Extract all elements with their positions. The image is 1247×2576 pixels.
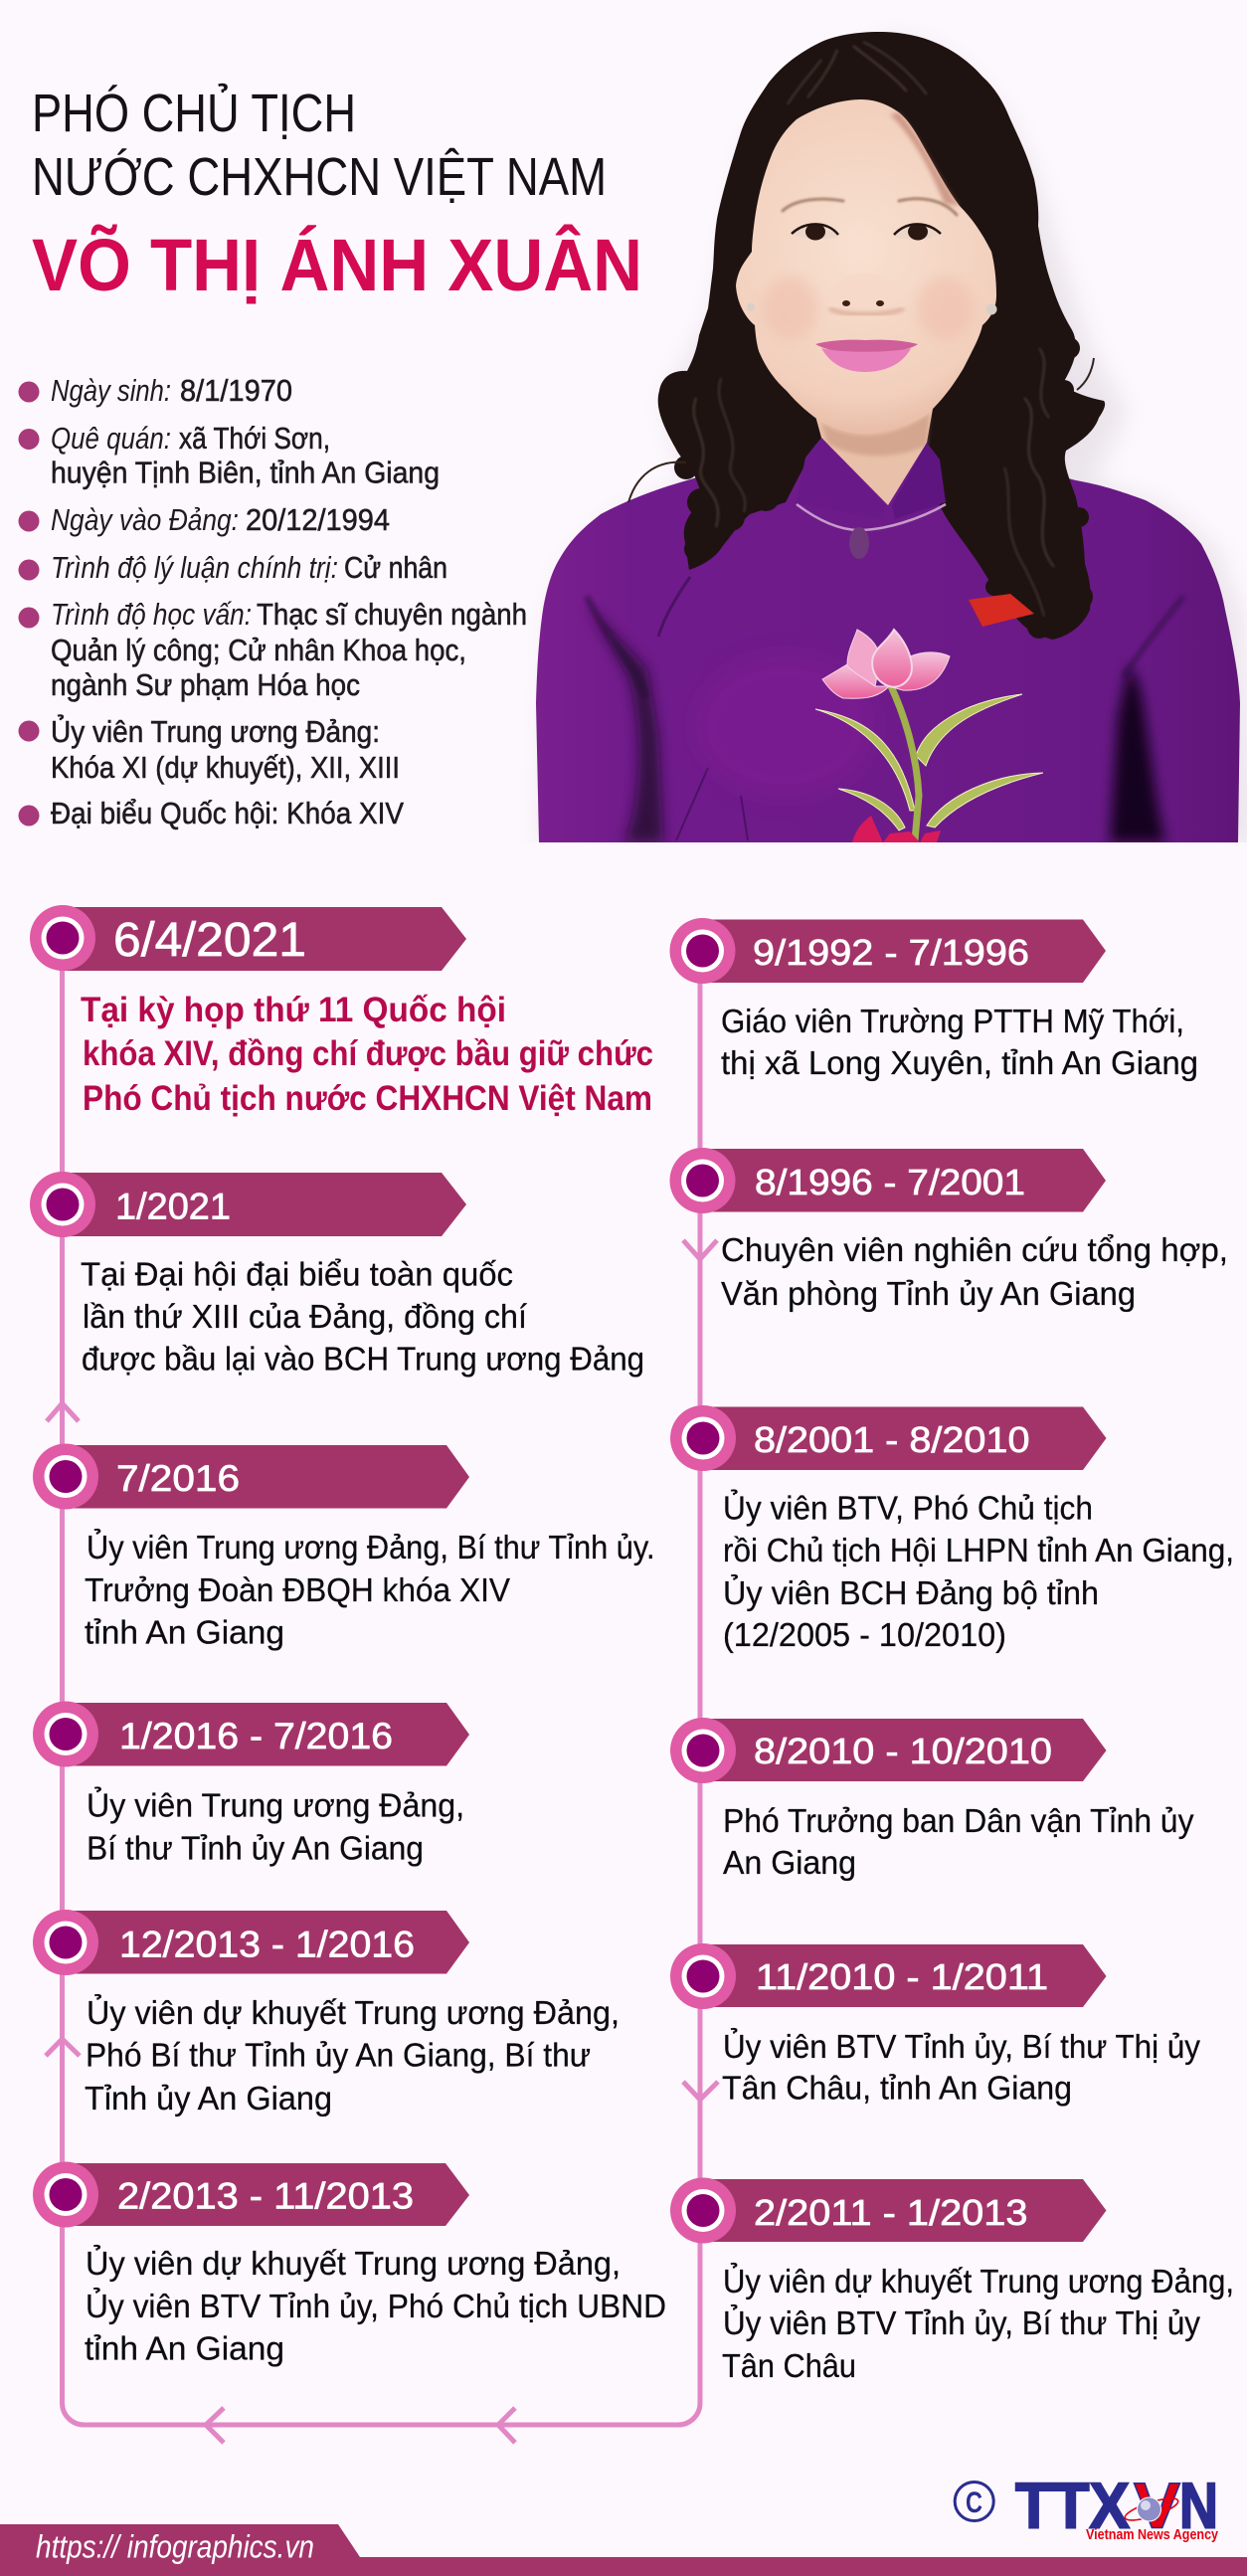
timeline entry: 11/2010 - 1/2011: Ủy viên BTV Tỉnh ủy, Bí thư Thị ủy (723, 2028, 1200, 2066)
stray hair wisps (628, 358, 1094, 502)
bullet: party admission date (18, 502, 390, 537)
timeline entry: 1/2016 - 7/2016: Bí thư Tỉnh ủy An Giang (87, 1830, 424, 1868)
timeline entry: 9/1992 - 7/1996: thị xã Long Xuyên, tỉnh An Giang (721, 1045, 1198, 1082)
timeline entry: 6/4/2021: Phó Chủ tịch nước CHXHCN Việt Nam (83, 1079, 652, 1118)
timeline entry: 8/1996 - 7/2001: Văn phòng Tỉnh ủy An Giang (721, 1276, 1136, 1313)
bullet: home town: huyện Tịnh Biên, tỉnh An Giang (51, 456, 440, 489)
bullet: education: Trình độ học vấn: (51, 597, 252, 632)
timeline entry: 6/4/2021: khóa XIV, đồng chí được bầu giữ chức (83, 1034, 653, 1073)
bullet: education (18, 597, 527, 702)
copyright symbol: C (966, 2486, 982, 2519)
timeline entry: 9/1992 - 7/1996: 9/1992 - 7/1996 (753, 932, 1029, 973)
agency tagline: Vietnam News Agency (1086, 2527, 1218, 2543)
neck (815, 408, 933, 505)
timeline entry: 2/2013 - 11/2013: 2/2013 - 11/2013 (117, 2176, 414, 2216)
timeline entry: 8/1996 - 7/2001: 8/1996 - 7/2001 (755, 1162, 1025, 1202)
arrow: down, right line lower (683, 2082, 718, 2100)
lips (815, 340, 918, 372)
timeline entry: 1/2021 (30, 1172, 644, 1379)
timeline entry: 12/2013 - 1/2016: Ủy viên dự khuyết Trung ương Đảng, (87, 1994, 620, 2032)
bullet: education: Thạc sĩ chuyên ngành (257, 597, 527, 632)
timeline entry: 7/2016 (33, 1444, 654, 1651)
wordmark V: V (1134, 2469, 1180, 2542)
timeline connector line (62, 938, 700, 2425)
timeline entry: 7/2016: Trưởng Đoàn ĐBQH khóa XIV (85, 1572, 511, 1609)
hair curls (659, 337, 1094, 639)
red buds (852, 816, 941, 842)
party pin (969, 594, 1034, 627)
globe emblem (1123, 2494, 1180, 2524)
bullet: date of birth: Ngày sinh: (51, 373, 171, 408)
timeline entry: 8/2010 - 10/2010: 8/2010 - 10/2010 (754, 1731, 1052, 1771)
timeline entry: 8/2001 - 8/2010 (670, 1405, 1234, 1654)
dress (536, 443, 1240, 842)
arrow: down, right line upper (683, 1240, 717, 1259)
eyes (792, 223, 941, 241)
timeline entry: 12/2013 - 1/2016: Phó Bí thư Tỉnh ủy An Giang, Bí thư (86, 2037, 591, 2075)
timeline entry: 8/2010 - 10/2010: Phó Trưởng ban Dân vận Tỉnh ủy (723, 1803, 1194, 1840)
nose (827, 300, 905, 316)
bullet: home town (18, 421, 440, 489)
bullet: central committee: Khóa XI (dự khuyết), XII, XIII (51, 750, 400, 785)
timeline entry: 8/2010 - 10/2010: An Giang (723, 1845, 856, 1882)
stem (891, 686, 919, 840)
timeline entry: 1/2021: lần thứ XIII của Đảng, đồng chí (83, 1299, 528, 1336)
timeline entry: 2/2011 - 1/2013 (670, 2178, 1234, 2385)
timeline entry: 7/2016: tỉnh An Giang (85, 1615, 284, 1651)
title: office line 1: PHÓ CHỦ TỊCH (32, 84, 356, 143)
timeline entry: 8/2001 - 8/2010: 8/2001 - 8/2010 (754, 1419, 1030, 1460)
timeline entry: 7/2016: 7/2016 (116, 1458, 240, 1499)
bullet: central committee: Ủy viên Trung ương Đảng: (51, 713, 380, 749)
timeline entry: 8/2001 - 8/2010: Ủy viên BTV, Phó Chủ tịch (723, 1490, 1093, 1528)
leaves (815, 694, 1043, 830)
timeline entry: 9/1992 - 7/1996: Giáo viên Trường PTTH Mỹ Thới, (721, 1004, 1184, 1040)
bullet: political theory level: Trình độ lý luận chính trị: (51, 550, 338, 585)
arrow: left, bottom line left (206, 2408, 224, 2443)
timeline entry: 1/2016 - 7/2016: Ủy viên Trung ương Đảng, (87, 1786, 464, 1824)
timeline entry: 11/2010 - 1/2011: Tân Châu, tỉnh An Giang (722, 2071, 1072, 2107)
bullet: party admission date: Ngày vào Đảng: (51, 502, 239, 537)
timeline entry: 7/2016: Ủy viên Trung ương Đảng, Bí thư Tỉnh ủy. (87, 1529, 654, 1566)
copyright symbol (955, 2483, 993, 2520)
bullet: date of birth (18, 373, 292, 408)
necklace (797, 504, 946, 530)
timeline entry: 8/2001 - 8/2010: Ủy viên BCH Đảng bộ tỉnh (723, 1574, 1099, 1612)
title: office line 2: NƯỚC CHXHCN VIỆT NAM (32, 147, 607, 207)
timeline entry: 2/2013 - 11/2013 (33, 2162, 666, 2367)
pendant (849, 527, 869, 559)
timeline entry: 1/2016 - 7/2016: 1/2016 - 7/2016 (119, 1716, 393, 1756)
footer bar (0, 2524, 1247, 2576)
bullet: party admission date: 20/12/1994 (246, 502, 390, 537)
timeline entry: 2/2011 - 1/2013: Tân Châu (722, 2348, 856, 2385)
face (736, 99, 996, 434)
lotus flower embroidery (815, 630, 1043, 842)
agency logo (955, 2469, 1218, 2543)
chin shadow (821, 413, 930, 456)
timeline entry: 1/2021: được bầu lại vào BCH Trung ương Đảng (82, 1341, 644, 1379)
timeline entry: 9/1992 - 7/1996 (670, 918, 1198, 1082)
timeline entry: 1/2016 - 7/2016 (33, 1701, 469, 1868)
footer URL: https:// infographics.vn (36, 2528, 314, 2564)
title block (32, 84, 642, 306)
hair (658, 32, 1105, 640)
timeline entry: 2/2013 - 11/2013: Ủy viên dự khuyết Trung ương Đảng, (86, 2245, 621, 2283)
collar (796, 438, 946, 519)
hair shadow on forehead (890, 112, 960, 206)
arrow: up, left line lower (46, 2039, 80, 2056)
timeline entry: 12/2013 - 1/2016: 12/2013 - 1/2016 (119, 1924, 415, 1965)
timeline entry: 2/2011 - 1/2013: 2/2011 - 1/2013 (754, 2192, 1028, 2233)
hair strands (694, 42, 1054, 617)
arrow: left, bottom line right (498, 2408, 515, 2443)
earrings (747, 303, 996, 314)
timeline entry: 12/2013 - 1/2016 (33, 1910, 620, 2117)
bullet: date of birth: 8/1/1970 (180, 373, 292, 408)
petals (822, 664, 889, 698)
timeline entry: 6/4/2021: Tại kỳ họp thứ 11 Quốc hội (81, 991, 506, 1029)
portrait photo (536, 32, 1247, 846)
cheek blush (763, 276, 973, 340)
timeline entry: 12/2013 - 1/2016: Tỉnh ủy An Giang (85, 2081, 332, 2117)
wordmark N: N (1179, 2469, 1218, 2542)
bullet: home town: xã Thới Sơn, (179, 421, 330, 456)
dress fold shading (587, 577, 1183, 842)
timeline entry: 11/2010 - 1/2011: 11/2010 - 1/2011 (756, 1956, 1048, 1997)
timeline entry: 8/1996 - 7/2001: Chuyên viên nghiên cứu tổng hợp, (721, 1232, 1228, 1269)
wordmark TTX: TTX (1015, 2469, 1130, 2542)
biography list (18, 373, 527, 830)
arrow: up, left line upper (47, 1403, 79, 1421)
title: name: VÕ THỊ ÁNH XUÂN (32, 224, 642, 306)
bullet: political theory level: Cử nhân (344, 550, 447, 585)
timeline entry: 8/2010 - 10/2010 (670, 1718, 1194, 1882)
timeline entry: 6/4/2021: 6/4/2021 (113, 914, 306, 967)
timeline entry: 11/2010 - 1/2011 (670, 1943, 1200, 2107)
bullet: national assembly: Đại biểu Quốc hội: Khóa XIV (51, 796, 404, 830)
timeline entry: 1/2021: Tại Đại hội đại biểu toàn quốc (81, 1257, 513, 1293)
eyebrows (783, 199, 957, 215)
timeline entry: 8/2001 - 8/2010: (12/2005 - 10/2010) (723, 1617, 1006, 1654)
timeline entry: 2/2011 - 1/2013: Ủy viên BTV Tỉnh ủy, Bí thư Thị ủy (723, 2304, 1200, 2342)
bullet: education: Quản lý công; Cử nhân Khoa học, (51, 633, 466, 667)
soft shadow behind portrait (538, 127, 1247, 842)
bullet: central committee (18, 713, 400, 785)
timeline entry: 2/2013 - 11/2013: tỉnh An Giang (85, 2331, 284, 2367)
timeline entry: 1/2021: 1/2021 (115, 1186, 231, 1227)
timeline entry: 8/1996 - 7/2001 (670, 1148, 1228, 1313)
bullet: education: ngành Sư phạm Hóa học (51, 667, 360, 702)
timeline entry: 2/2013 - 11/2013: Ủy viên BTV Tỉnh ủy, Phó Chủ tịch UBND (86, 2288, 666, 2325)
timeline entry: 6/4/2021 (30, 905, 653, 1118)
bullet: home town: Quê quán: (51, 421, 171, 456)
